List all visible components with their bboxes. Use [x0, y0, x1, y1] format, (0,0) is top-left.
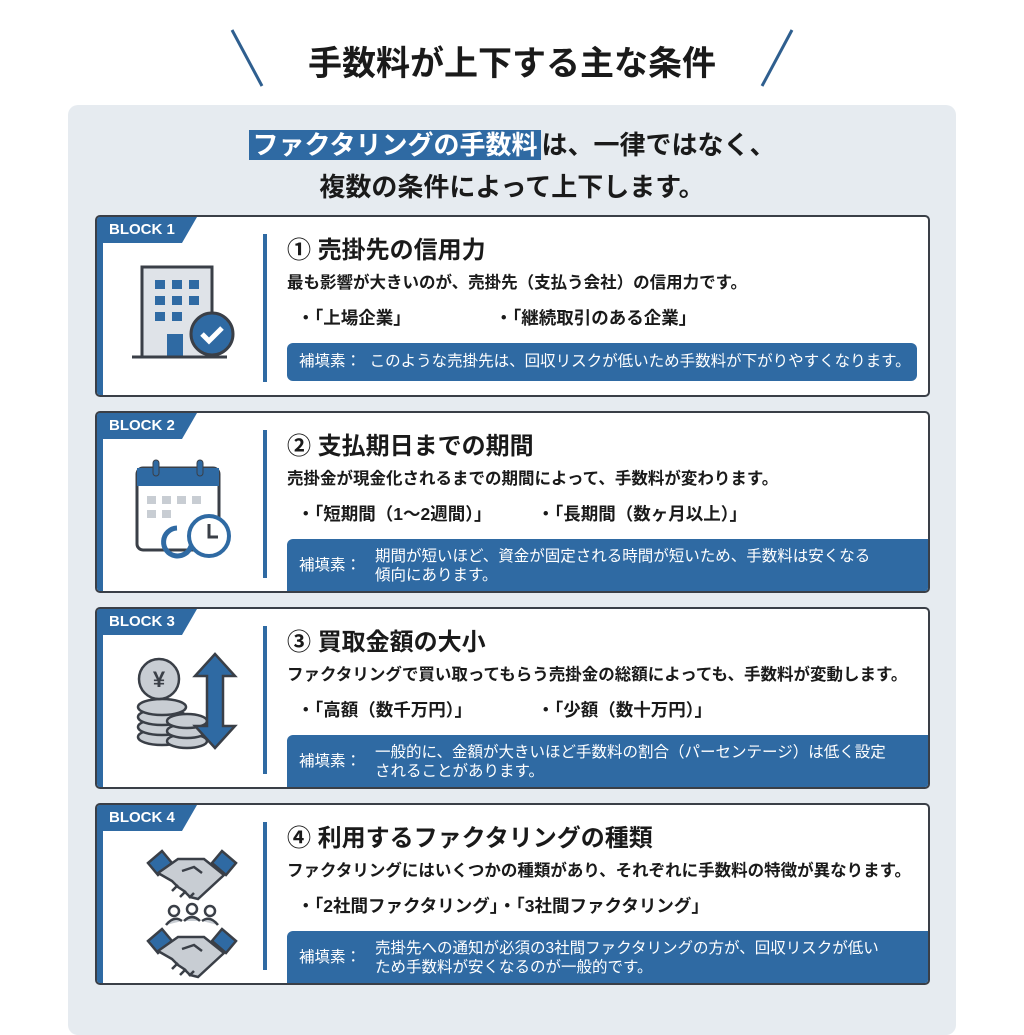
bullets: ・「上場企業」 — [297, 308, 411, 328]
subtitle — [249, 130, 775, 202]
panel: block 2 — [95, 411, 930, 593]
heading: ① 売掛先の信用力 — [287, 237, 486, 264]
bullets: ・「2社間ファクタリング」・「3社間ファクタリング」 — [297, 896, 709, 916]
note: 売掛先への通知が必須の3社間ファクタリングの方が、回収リスクが低い — [375, 940, 879, 957]
text: 最も影響が大きいのが、売掛先（支払う会社）の信用力です。 — [287, 274, 747, 292]
note: 補填素： このような売掛先は、回収リスクが低いため手数料が下がりやすくなります。 — [299, 353, 911, 370]
note — [287, 735, 937, 795]
icon: building with check — [132, 266, 234, 358]
note: 期間が短いほど、資金が固定される時間が短いため、手数料は安くなる — [375, 548, 870, 565]
note: 補填素： — [299, 753, 361, 770]
panel: block 1 — [95, 215, 930, 397]
text: 売掛金が現金化されるまでの期間によって、手数料が変わります。 — [287, 470, 778, 488]
bullets: ・「高額（数千万円）」 — [297, 700, 472, 720]
tab: BLOCK 4 — [109, 809, 175, 826]
panel: block 4 — [95, 803, 930, 985]
heading: ② 支払期日までの期間 — [287, 433, 534, 460]
icon: coins with arrow — [136, 652, 238, 750]
note: 傾向にあります。 — [375, 567, 497, 584]
panel: block 3: ・「少額（数十万円）」 — [537, 700, 712, 720]
note: 補填素： — [299, 949, 361, 966]
decorative slashes — [230, 29, 794, 87]
note: されることがあります。 — [375, 763, 544, 780]
note — [287, 931, 937, 991]
panel: main — [68, 105, 956, 1035]
tab — [97, 609, 197, 635]
subtitle: ファクタリングの手数料は、一律ではなく、 — [252, 130, 775, 160]
bullets: ・「短期間（1〜2週間）」 — [297, 504, 491, 524]
note — [287, 343, 917, 381]
title: 手数料が上下する主な条件 — [308, 45, 716, 83]
note — [287, 539, 937, 599]
panel: block 3 — [95, 607, 930, 789]
note: 一般的に、金額が大きいほど手数料の割合（パーセンテージ）は低く設定 — [375, 744, 886, 761]
panel: block 2: ・「長期間（数ヶ月以上）」 — [537, 504, 747, 524]
heading: ④ 利用するファクタリングの種類 — [287, 825, 653, 852]
subtitle: 複数の条件によって上下します。 — [319, 172, 705, 202]
tab — [97, 217, 197, 243]
icon: handshakes — [146, 849, 238, 978]
tab — [97, 805, 197, 831]
tab: BLOCK 2 — [109, 417, 175, 434]
icon: calendar clock — [136, 460, 231, 558]
note: 補填素： — [299, 557, 361, 574]
text: ファクタリングで買い取ってもらう売掛金の総額によっても、手数料が変動します。 — [287, 666, 907, 684]
icon: coins with arrow: ¥ — [153, 667, 166, 692]
panel: block 1: ・「継続取引のある企業」 — [495, 308, 696, 328]
tab: BLOCK 3 — [109, 613, 175, 630]
note: ため手数料が安くなるのが一般的です。 — [375, 959, 652, 976]
tab — [97, 413, 197, 439]
tab: BLOCK 1 — [109, 221, 175, 238]
heading: ③ 買取金額の大小 — [287, 629, 486, 656]
text: ファクタリングにはいくつかの種類があり、それぞれに手数料の特徴が異なります。 — [287, 862, 911, 880]
